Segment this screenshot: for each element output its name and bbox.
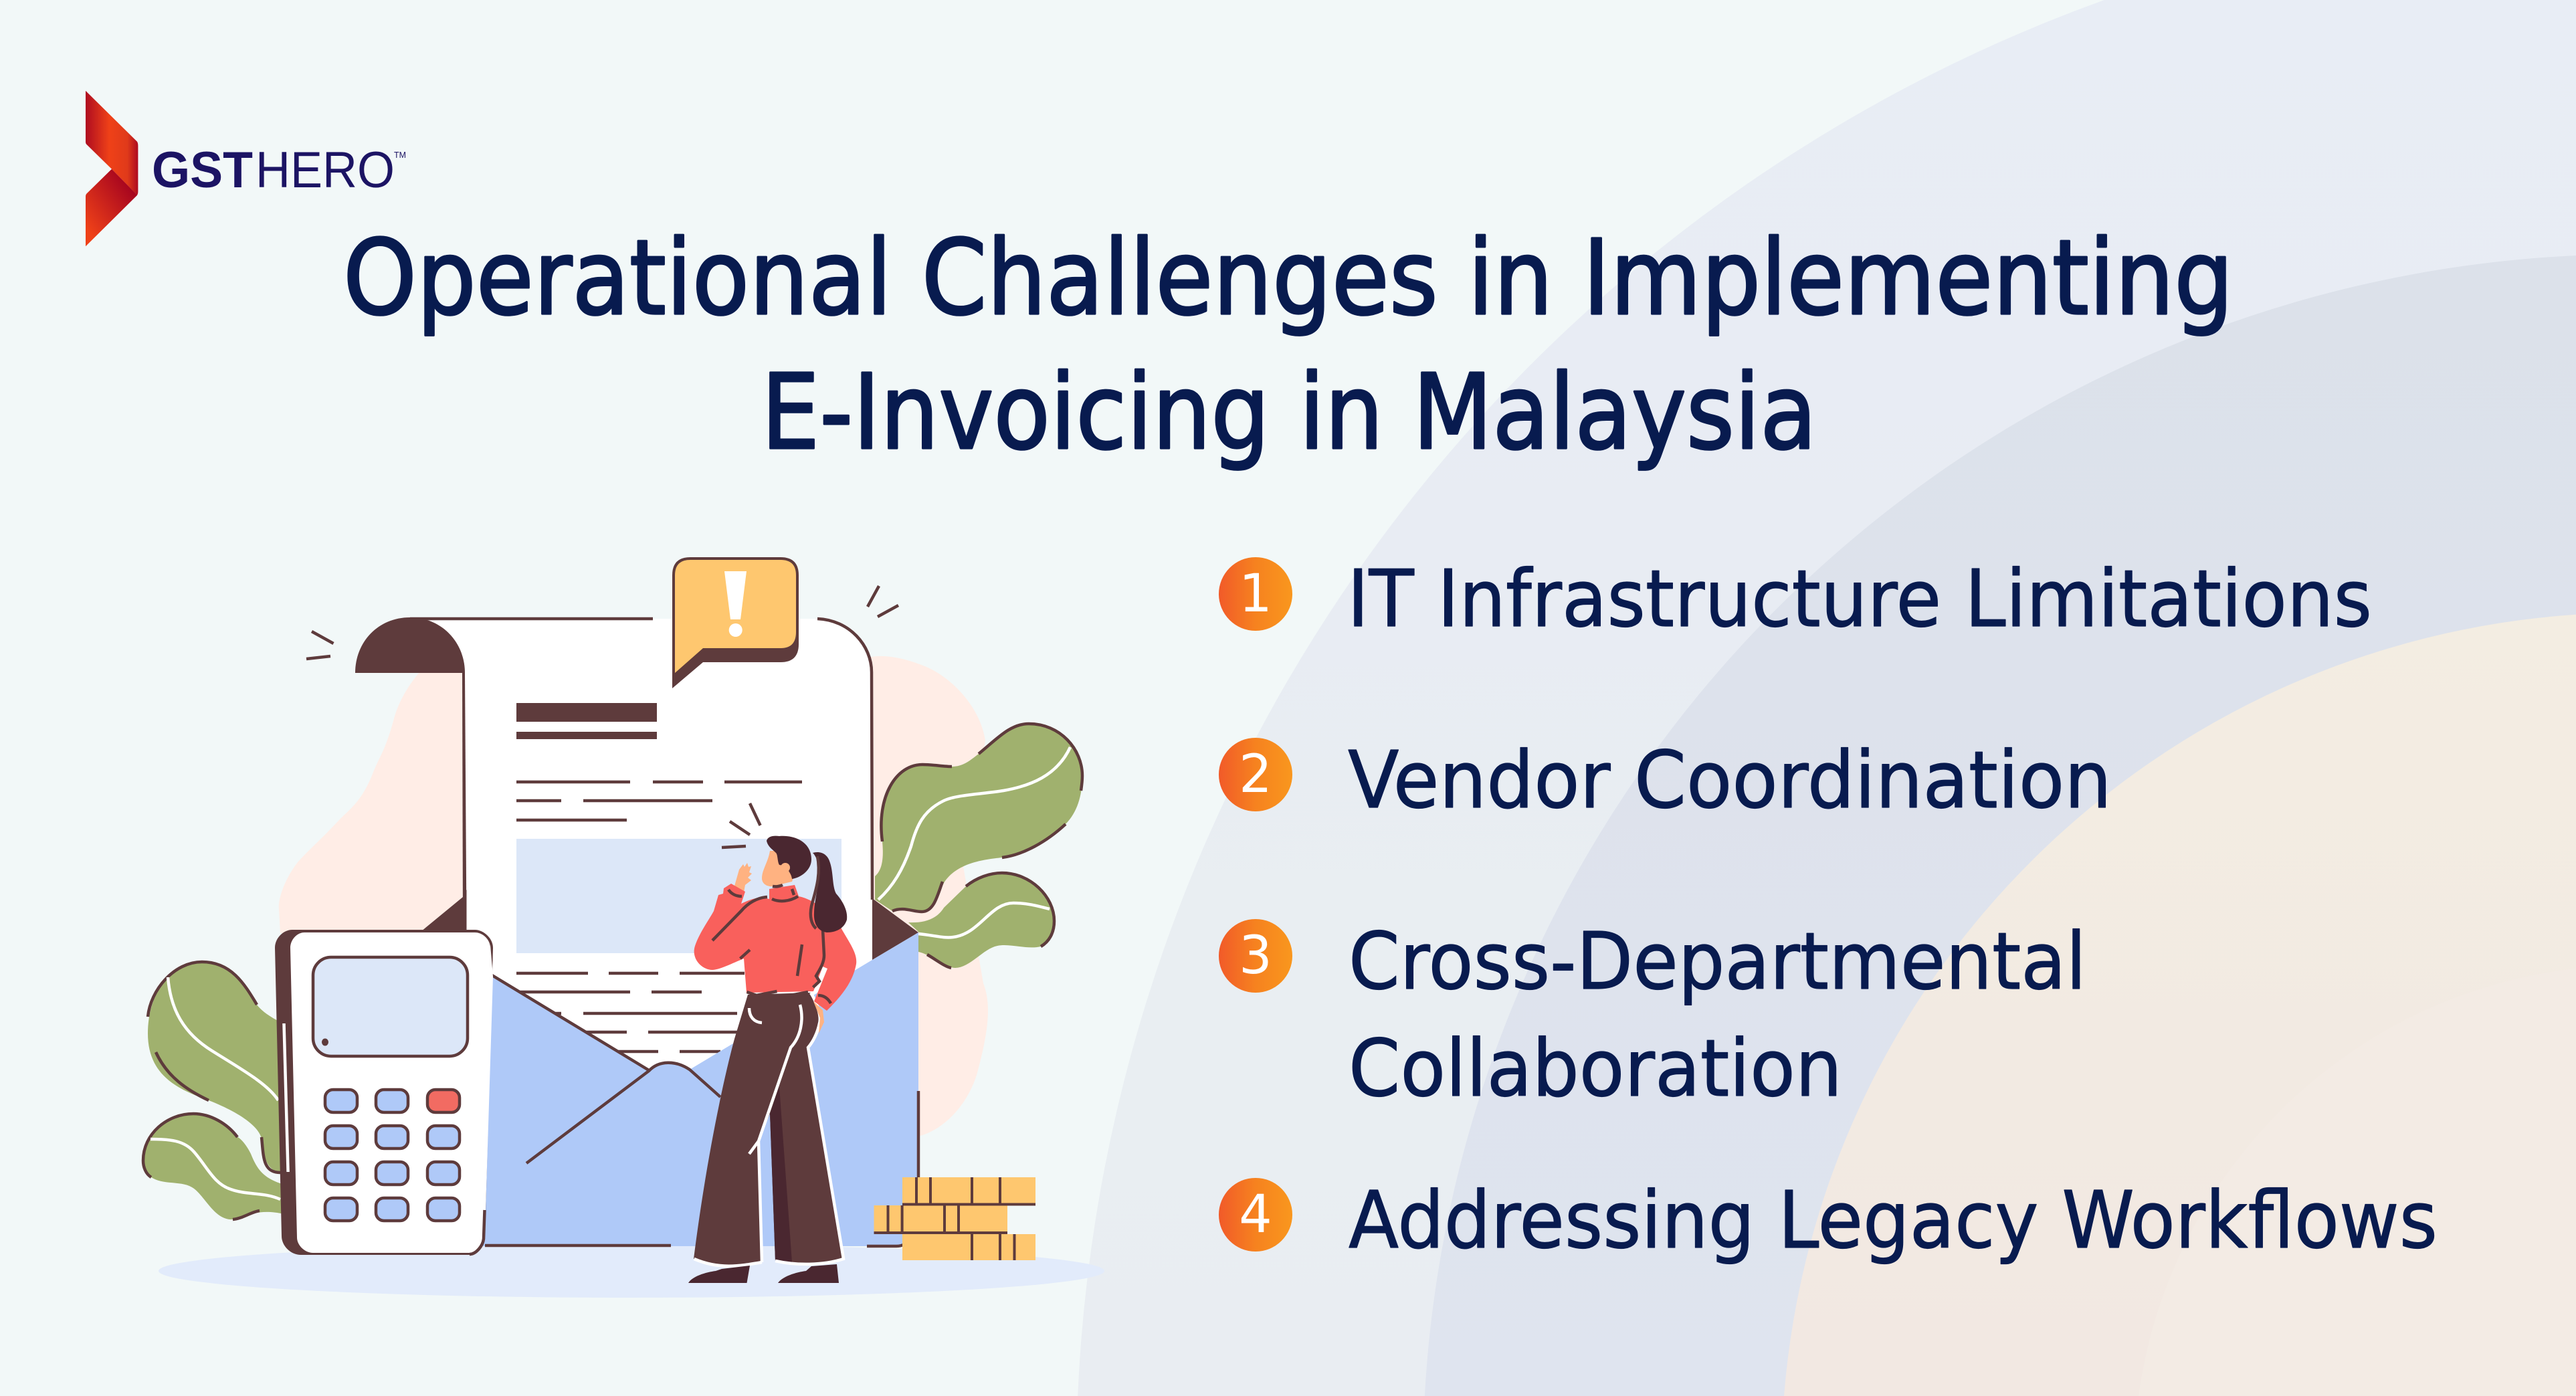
paper heading bars [516, 703, 657, 739]
calculator [275, 930, 493, 1255]
sweater [694, 884, 856, 1011]
item 3: Collaboration [1349, 1022, 1842, 1114]
item 3 [1219, 915, 2086, 1114]
left leaves [143, 962, 284, 1219]
number badge 3: 3 [1239, 926, 1272, 986]
logo wordmark: GST [152, 142, 253, 199]
item 4: Addressing Legacy Workflows [1349, 1174, 2438, 1266]
envelope [482, 898, 918, 1246]
trousers [694, 993, 844, 1266]
chin line [773, 885, 783, 886]
logo mark [86, 91, 138, 246]
hip hand [813, 1001, 824, 1033]
logo: GSTHERO: HERO [256, 142, 395, 199]
paper [355, 617, 872, 1244]
number badge 2 [1219, 738, 1292, 811]
spark lines [306, 586, 898, 847]
item 2: Vendor Coordination [1348, 734, 2112, 826]
title: E-Invoicing in Malaysia [761, 352, 1817, 473]
title [343, 217, 2234, 473]
calculator screen [313, 957, 468, 1056]
number badge 3 [1219, 919, 1292, 993]
number badge 1: 1 [1239, 564, 1272, 624]
shoes [688, 1266, 750, 1283]
ear [781, 863, 790, 872]
number badge 1 [1219, 557, 1292, 631]
exclamation mark [724, 571, 747, 637]
ground shadow [159, 1244, 1104, 1298]
paper blue panel [516, 839, 841, 953]
ponytail strand [811, 856, 819, 928]
number badge 4: 4 [1239, 1185, 1272, 1245]
coins [874, 1177, 1035, 1260]
logo: GSTHERO: TM [394, 150, 406, 160]
raised hand [734, 863, 752, 892]
face [762, 851, 796, 886]
number badge 4 [1219, 1178, 1292, 1252]
title: Operational Challenges in Implementing [343, 217, 2234, 338]
number badge 2: 2 [1239, 744, 1272, 805]
item 3: Cross-Departmental [1349, 915, 2086, 1007]
paper text lines [516, 782, 802, 1052]
item 1: IT Infrastructure Limitations [1347, 553, 2372, 645]
trouser highlights [694, 993, 844, 1266]
right leaves [875, 724, 1082, 968]
concentric background arcs [1078, 0, 2576, 1396]
list: challenges [1219, 553, 2438, 1266]
logo: GSTHERO [86, 91, 406, 246]
trouser shadow [770, 1086, 792, 1262]
sweater creases [712, 889, 831, 1003]
hair [767, 836, 811, 879]
woman [688, 836, 856, 1283]
calculator keys [325, 1090, 460, 1221]
peach blob [279, 656, 988, 1136]
alert speech bubble [672, 557, 799, 688]
illustration [143, 557, 1104, 1298]
ponytail [813, 852, 847, 932]
